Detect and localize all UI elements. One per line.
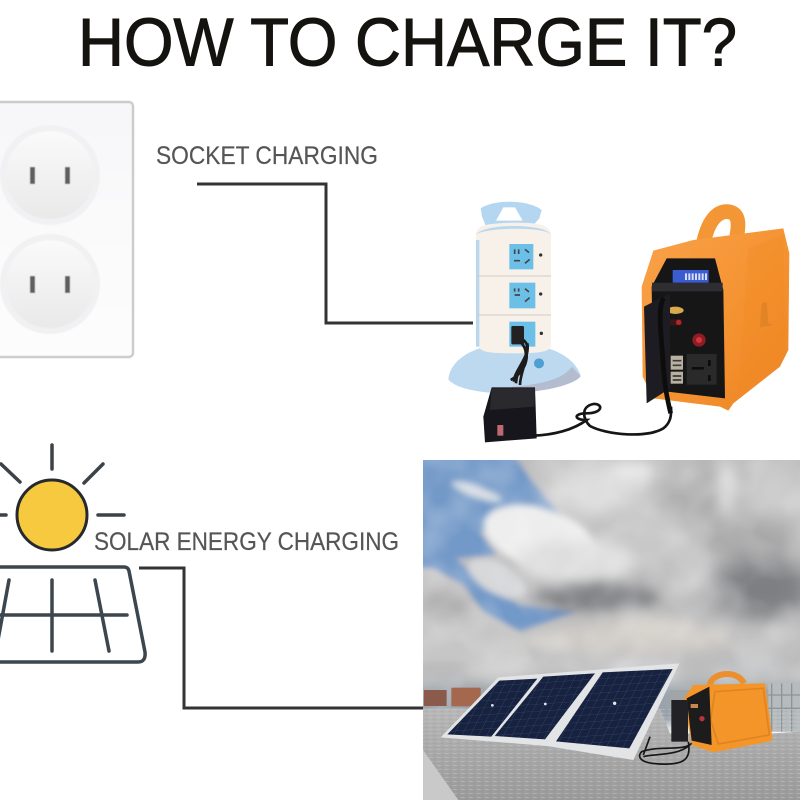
connector line: solar icon to photo [139, 568, 425, 708]
orange power station [642, 212, 789, 413]
ac outlet [687, 354, 717, 385]
icon: solar panel [0, 567, 145, 662]
title: HOW TO CHARGE IT? [78, 4, 737, 80]
power strip tower [448, 202, 581, 393]
icon: upper outlet [0, 125, 100, 225]
tower base [448, 343, 581, 393]
tower body [476, 223, 551, 353]
icon: sun [0, 445, 124, 550]
front control panel [652, 258, 725, 398]
handle [481, 202, 542, 232]
open door [644, 293, 670, 403]
solar panel array [441, 663, 679, 760]
sky [423, 460, 800, 733]
connector line: socket to power strip [197, 184, 473, 323]
charging cable [533, 404, 671, 436]
usb ports [671, 356, 683, 370]
socket faces [509, 244, 533, 269]
battery display [673, 270, 709, 283]
rooftop ground [423, 708, 800, 800]
socket charging label: SOCKET CHARGING [156, 142, 378, 170]
power adapter and cable [483, 387, 671, 442]
icon: lower outlet [0, 234, 100, 334]
brand badge and controls [667, 307, 684, 314]
photo: solar panels on rooftop [423, 460, 800, 800]
distant buildings [424, 682, 800, 732]
carrying handle [703, 212, 738, 247]
solar energy charging label: SOLAR ENERGY CHARGING [94, 528, 399, 556]
power station and cables [640, 674, 773, 764]
icon: wall outlet plate [0, 102, 133, 357]
case body [642, 228, 789, 411]
plug and cable [511, 326, 524, 344]
